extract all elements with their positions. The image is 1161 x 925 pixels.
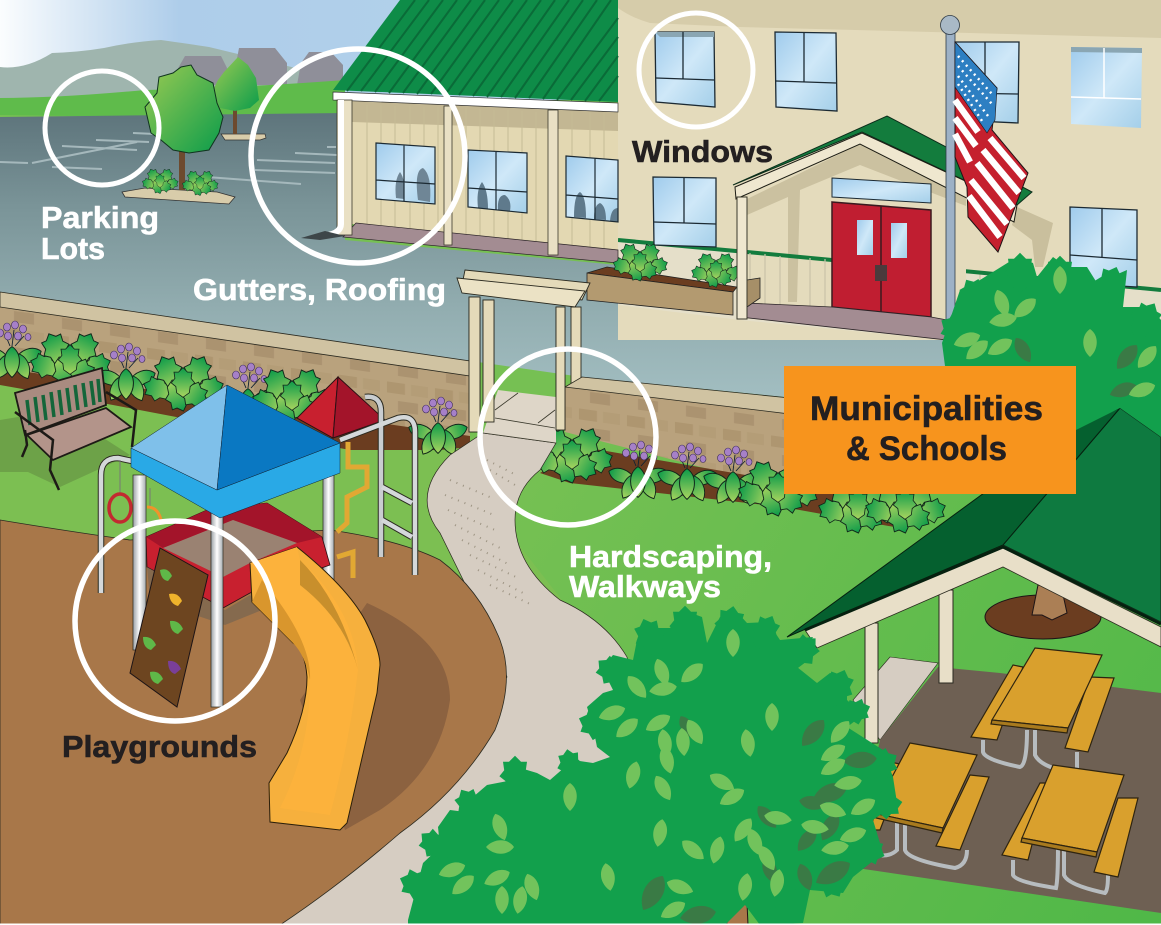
label: gutters, roofing: Gutters, Roofing bbox=[193, 272, 446, 307]
title box: Municipalities bbox=[810, 390, 1043, 428]
window: lower left bbox=[653, 177, 716, 247]
windows bbox=[653, 32, 1142, 287]
entrance portico bbox=[733, 116, 1053, 340]
swing bar and ring bbox=[101, 458, 161, 593]
parking lot trees bbox=[122, 57, 266, 204]
playground structure bbox=[101, 377, 415, 830]
porch windows with silhouettes bbox=[376, 143, 618, 222]
window: top left bbox=[655, 32, 715, 107]
table: back bbox=[971, 648, 1114, 772]
highlight circle: windows bbox=[639, 13, 753, 127]
picnic tables bbox=[870, 648, 1138, 893]
label: parking lots: Lots bbox=[41, 231, 105, 266]
border plants bbox=[0, 321, 950, 537]
highlight circle: gutters and roofing bbox=[251, 49, 465, 263]
label: hardscaping, walkways: Hardscaping, bbox=[569, 539, 772, 574]
title box: & Schools bbox=[846, 430, 1007, 468]
bottom edge line bbox=[0, 924, 1161, 925]
window: behind flag bbox=[953, 42, 1019, 123]
highlight circle: playgrounds bbox=[75, 521, 275, 721]
park bench bbox=[0, 368, 136, 490]
ladder bars bbox=[340, 397, 415, 575]
window: lower right bbox=[1070, 207, 1137, 287]
platform bbox=[146, 503, 330, 625]
retaining wall bbox=[0, 292, 950, 537]
table: lower right bbox=[1002, 765, 1138, 893]
table: lower left bbox=[870, 743, 989, 868]
label: hardscaping, walkways: Walkways bbox=[569, 569, 721, 604]
highlight circle: parking lots bbox=[45, 71, 159, 185]
window: top second bbox=[775, 32, 837, 111]
highlight circle: hardscaping bbox=[480, 349, 656, 525]
walkway bbox=[280, 297, 700, 925]
concrete pavement and parking lot bbox=[0, 113, 1161, 440]
foreground tree bbox=[395, 603, 905, 925]
blue roof bbox=[131, 385, 340, 518]
label: parking lots: Parking bbox=[41, 200, 159, 235]
window: top right bbox=[1071, 47, 1142, 128]
planter box bbox=[587, 197, 760, 319]
main school building bbox=[618, 0, 1161, 360]
right hedge bbox=[934, 253, 1161, 437]
flag and pole bbox=[940, 16, 1028, 368]
climbing wall bbox=[130, 548, 208, 707]
label: playgrounds: Playgrounds bbox=[62, 729, 257, 764]
title box bbox=[784, 366, 1076, 494]
arbor bbox=[457, 270, 590, 432]
light leaves bbox=[437, 629, 878, 923]
playground surface bbox=[0, 520, 506, 925]
slide bbox=[250, 547, 380, 830]
shade pavilion bbox=[787, 408, 1161, 913]
dark leaves bbox=[635, 713, 877, 925]
porch building with green roof bbox=[301, 0, 618, 263]
label: windows: Windows bbox=[632, 134, 773, 169]
